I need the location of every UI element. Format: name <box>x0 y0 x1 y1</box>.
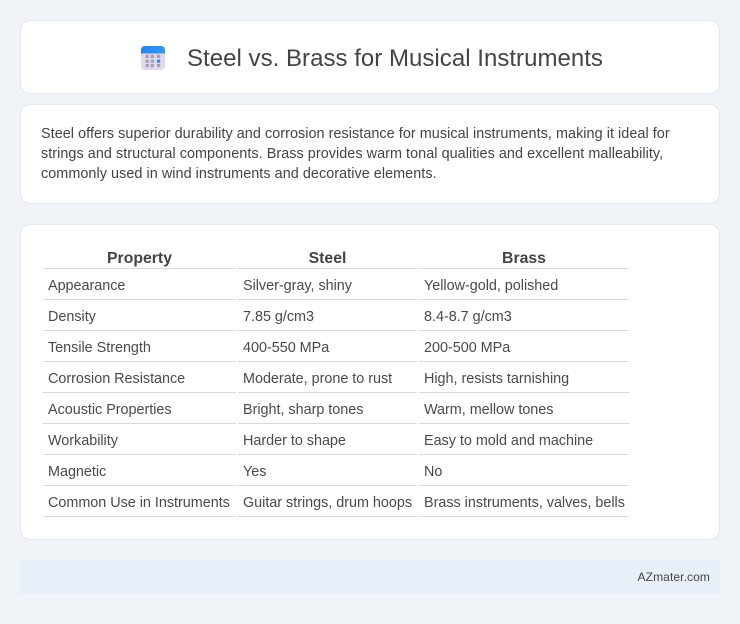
panel: title card <box>20 20 720 94</box>
row: density: Density <box>48 309 96 325</box>
summary text: Steel offers superior durability and corrosion resistance for musical instruments, making it ideal for <box>41 126 670 142</box>
row: corrosion resistance: Corrosion Resistance <box>48 371 185 387</box>
panel: comparison table card <box>20 224 720 540</box>
row: workability: Harder to shape <box>243 433 346 449</box>
row: common use in instruments: Common Use in Instruments <box>48 495 230 511</box>
row: workability <box>43 433 629 455</box>
row: appearance <box>43 278 629 300</box>
summary text: strings and structural components. Brass provides warm tonal qualities and excellent malleability, <box>41 146 663 162</box>
table header: Property <box>107 250 172 267</box>
panel: summary card <box>20 104 720 204</box>
row: acoustic properties <box>43 402 629 424</box>
row: appearance: Appearance <box>48 278 125 294</box>
row: appearance: Silver-gray, shiny <box>243 278 352 294</box>
row: corrosion resistance: High, resists tarnishing <box>424 371 569 387</box>
row: workability: Easy to mold and machine <box>424 433 593 449</box>
footer credit: AZmater.com <box>638 570 710 584</box>
table header <box>43 250 629 269</box>
comparison table <box>43 250 629 517</box>
row: common use in instruments <box>43 495 629 517</box>
row: density: 8.4-8.7 g/cm3 <box>424 309 512 325</box>
table header: Brass <box>502 250 546 267</box>
icon: calendar <box>141 46 165 70</box>
row: common use in instruments: Brass instruments, valves, bells <box>424 495 625 511</box>
row: acoustic properties: Bright, sharp tones <box>243 402 363 418</box>
row: corrosion resistance <box>43 371 629 393</box>
row: acoustic properties: Warm, mellow tones <box>424 402 553 418</box>
row: tensile strength: 200-500 MPa <box>424 340 510 356</box>
summary text <box>41 126 670 182</box>
row: tensile strength <box>43 340 629 362</box>
row: tensile strength: 400-550 MPa <box>243 340 329 356</box>
row: acoustic properties: Acoustic Properties <box>48 402 172 418</box>
row: workability: Workability <box>48 433 118 449</box>
footer bar <box>20 560 720 594</box>
table header: Steel <box>309 250 346 267</box>
row: common use in instruments: Guitar strings, drum hoops <box>243 495 412 511</box>
title: Steel vs. Brass for Musical Instruments <box>187 45 603 72</box>
row: corrosion resistance: Moderate, prone to rust <box>243 371 392 387</box>
row: magnetic <box>43 464 629 486</box>
row: density <box>43 309 629 331</box>
row: magnetic: Magnetic <box>48 464 106 480</box>
row: magnetic: No <box>424 464 442 480</box>
row: appearance: Yellow-gold, polished <box>424 278 558 294</box>
row: density: 7.85 g/cm3 <box>243 309 314 325</box>
summary text: commonly used in wind instruments and decorative elements. <box>41 166 437 182</box>
row: magnetic: Yes <box>243 464 266 480</box>
row: tensile strength: Tensile Strength <box>48 340 151 356</box>
